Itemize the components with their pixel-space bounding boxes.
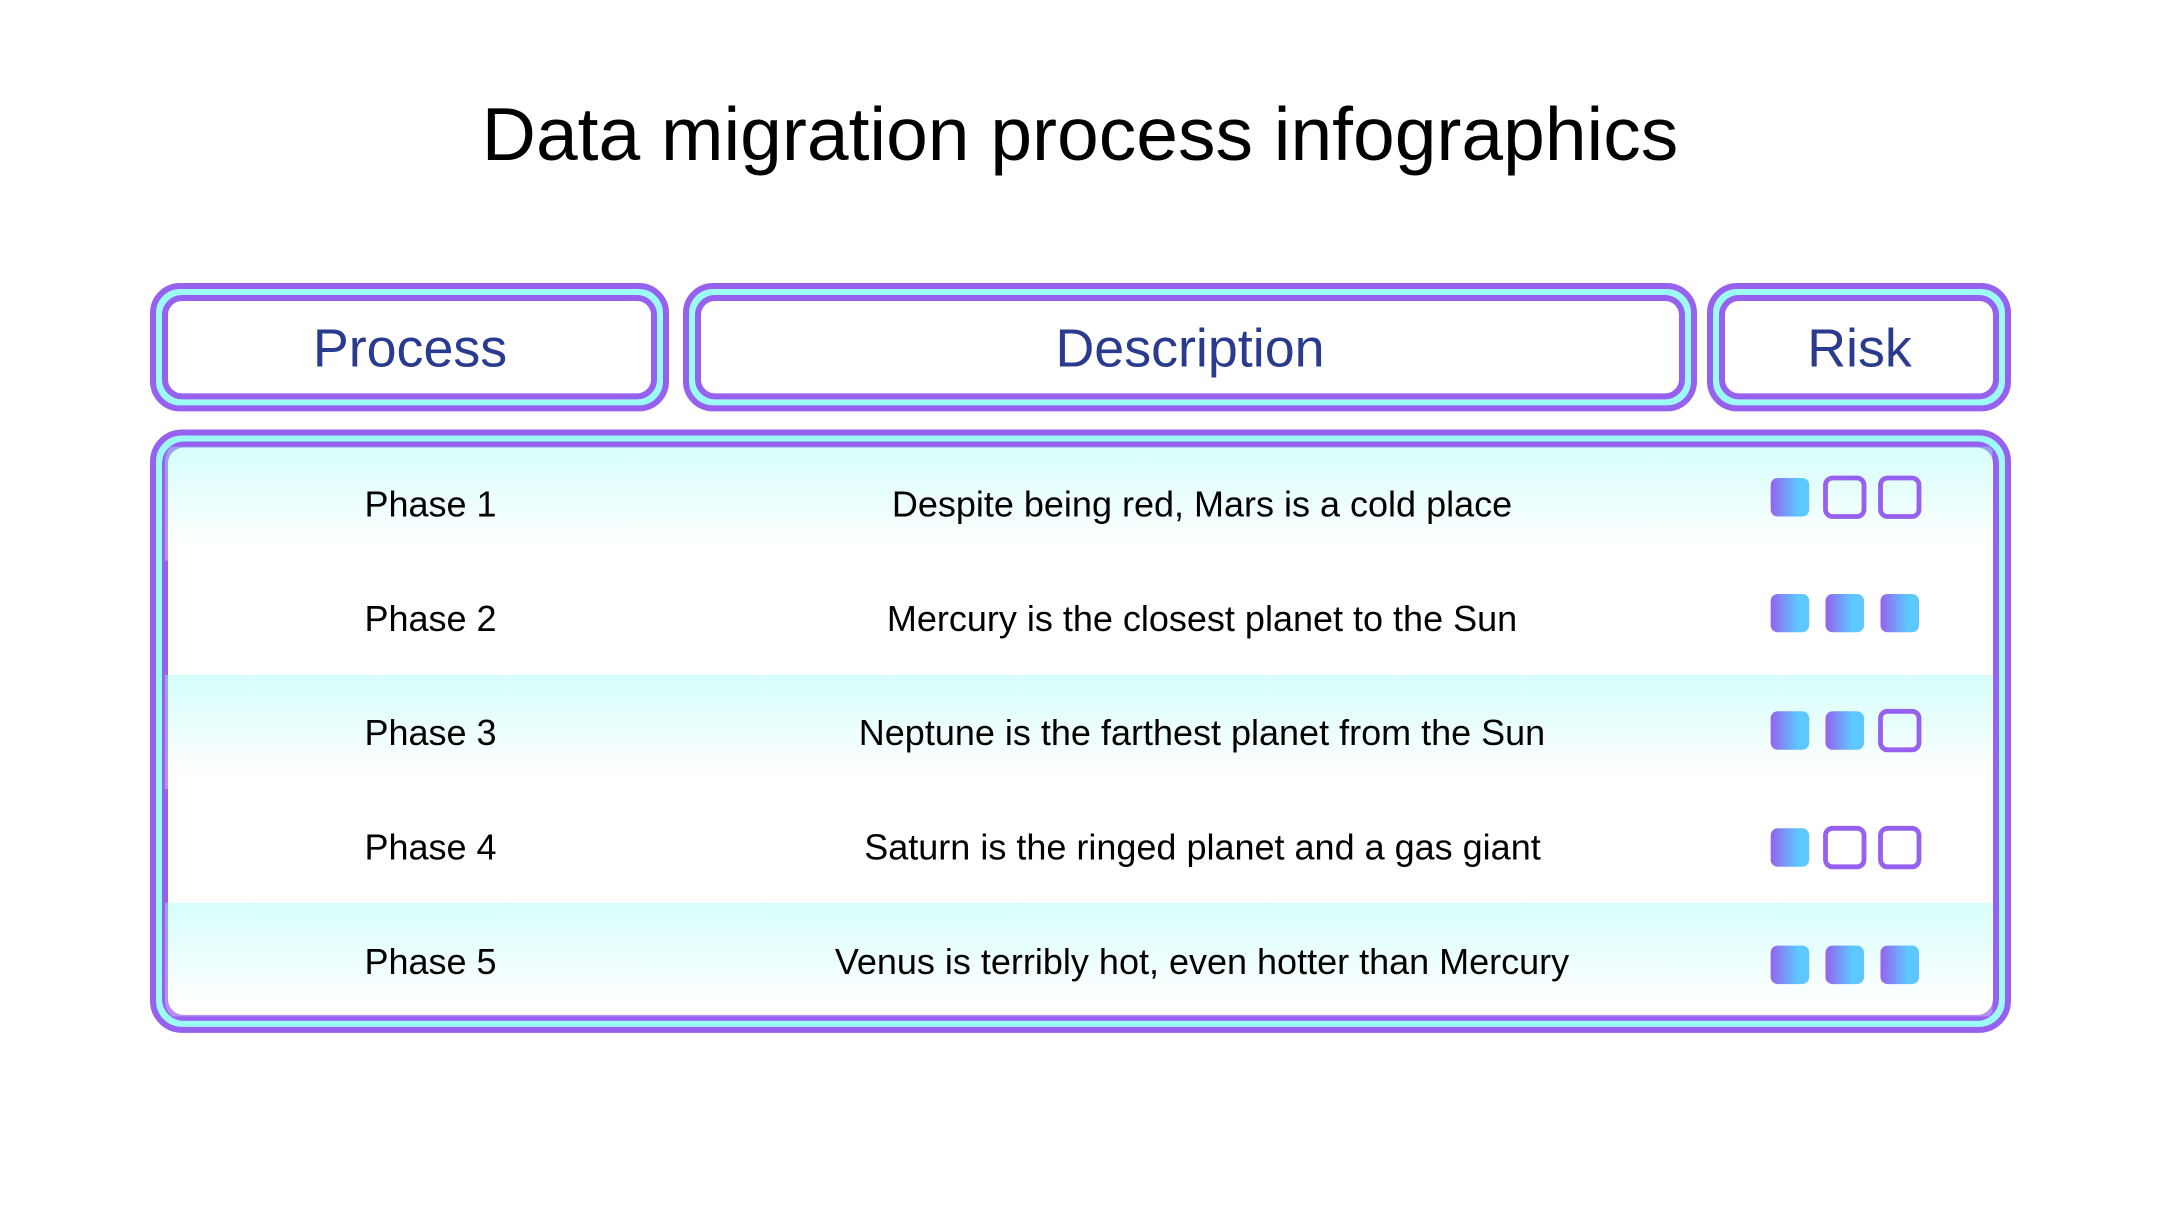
row: Phase 1: Phase 1 [364,484,497,525]
row: Phase 2: Mercury is the closest planet to the Sun [887,598,1517,639]
row: Phase 4: Saturn is the ringed planet and a gas giant [864,827,1541,868]
header: Description: Description [1055,319,1325,379]
header: Risk: Risk [1807,319,1912,379]
row: Phase 1 [364,478,1919,525]
header: Description [686,286,1694,408]
title: Data migration process infographics [482,92,1678,176]
header: Process: Process [313,319,507,379]
risk: 1 of 3 [1771,478,1919,516]
row: Phase 4 [364,827,1919,868]
risk: 1 of 3 [1771,828,1919,867]
row shading bands [165,447,1992,1016]
row: Phase 2: Phase 2 [364,598,497,639]
risk: 2 of 3 [1771,711,1919,750]
risk: 3 of 3 [1771,946,1919,984]
header: Risk [1710,286,2008,408]
row: Phase 3: Neptune is the farthest planet from the Sun [859,712,1545,753]
row: Phase 1: Despite being red, Mars is a cold place [892,484,1512,525]
row: Phase 5: Venus is terribly hot, even hotter than Mercury [835,941,1569,982]
header: Process [153,286,666,408]
row: Phase 2 [364,594,1919,639]
row: Phase 4: Phase 4 [364,827,497,868]
panel: table [153,432,2008,1030]
row: Phase 3 [364,711,1919,753]
row: Phase 5: Phase 5 [364,941,497,982]
row: Phase 5 [364,941,1919,984]
row: Phase 3: Phase 3 [364,712,497,753]
risk: 3 of 3 [1771,594,1919,632]
